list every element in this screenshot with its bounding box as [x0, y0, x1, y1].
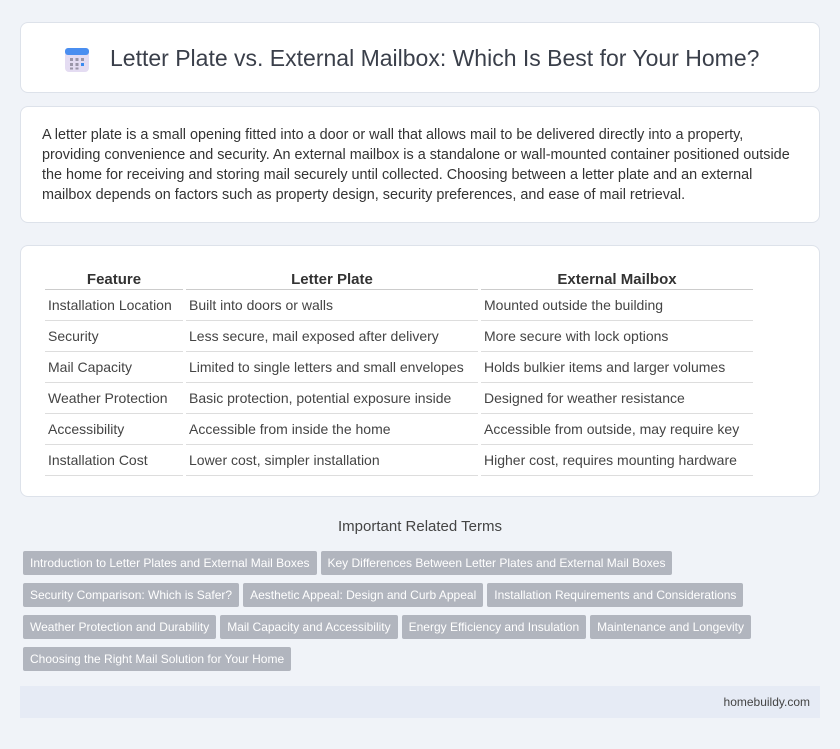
comparison table: Basic protection, potential exposure inside: [189, 390, 451, 406]
comparison table: Lower cost, simpler installation: [189, 452, 380, 468]
comparison table: Weather Protection: [48, 390, 168, 406]
related terms tags: Introduction to Letter Plates and External Mail Boxes: [30, 556, 310, 570]
comparison table: Designed for weather resistance: [484, 390, 685, 406]
comparison table: Higher cost, requires mounting hardware: [484, 452, 737, 468]
related terms tags: Weather Protection and Durability: [30, 620, 209, 634]
comparison table: Installation Cost: [48, 452, 148, 468]
related terms tags: Aesthetic Appeal: Design and Curb Appeal: [250, 588, 476, 602]
comparison table: Holds bulkier items and larger volumes: [484, 359, 725, 375]
comparison table: More secure with lock options: [484, 328, 668, 344]
comparison table: Accessibility: [48, 421, 124, 437]
related terms heading: Important Related Terms: [338, 518, 502, 535]
comparison table: Security: [48, 328, 99, 344]
comparison table: Letter Plate: [291, 271, 373, 288]
comparison table: External Mailbox: [557, 271, 677, 288]
footer: [20, 686, 820, 718]
related terms tags: Energy Efficiency and Insulation: [409, 620, 579, 634]
title card: [20, 22, 820, 93]
intro text: A letter plate is a small opening fitted into a door or wall that allows mail to be delivered directly into a property, providing convenience and security. An external mailbox is a standalone or wall-mounted container positioned outside the home for receiving and storing mail securely until collected. Choosing between a letter plate and an external mailbox depends on factors such as property design, security preferences, and ease of mail retrieval.: [42, 127, 790, 203]
related terms tags: Mail Capacity and Accessibility: [227, 620, 391, 634]
comparison table: Mail Capacity: [48, 359, 132, 375]
footer: homebuildy.com: [724, 695, 810, 709]
comparison table: Feature: [87, 271, 141, 288]
comparison table: Limited to single letters and small envelopes: [189, 359, 464, 375]
intro text: [20, 106, 820, 223]
related terms tags: Installation Requirements and Considerations: [494, 588, 736, 602]
comparison table: Installation Location: [48, 297, 172, 313]
related terms tags: Choosing the Right Mail Solution for Your Home: [30, 652, 284, 666]
related terms tags: Maintenance and Longevity: [597, 620, 744, 634]
comparison table: Mounted outside the building: [484, 297, 663, 313]
comparison table: Accessible from outside, may require key: [484, 421, 739, 437]
related terms tags: [23, 551, 751, 671]
comparison table: [20, 245, 820, 497]
comparison table: Less secure, mail exposed after delivery: [189, 328, 439, 344]
comparison table: Built into doors or walls: [189, 297, 333, 313]
related terms tags: Security Comparison: Which is Safer?: [30, 588, 232, 602]
related terms tags: Key Differences Between Letter Plates and External Mail Boxes: [328, 556, 665, 570]
icon: calendar: [65, 48, 89, 72]
title: Letter Plate vs. External Mailbox: Which Is Best for Your Home?: [110, 45, 759, 71]
comparison table: Accessible from inside the home: [189, 421, 391, 437]
